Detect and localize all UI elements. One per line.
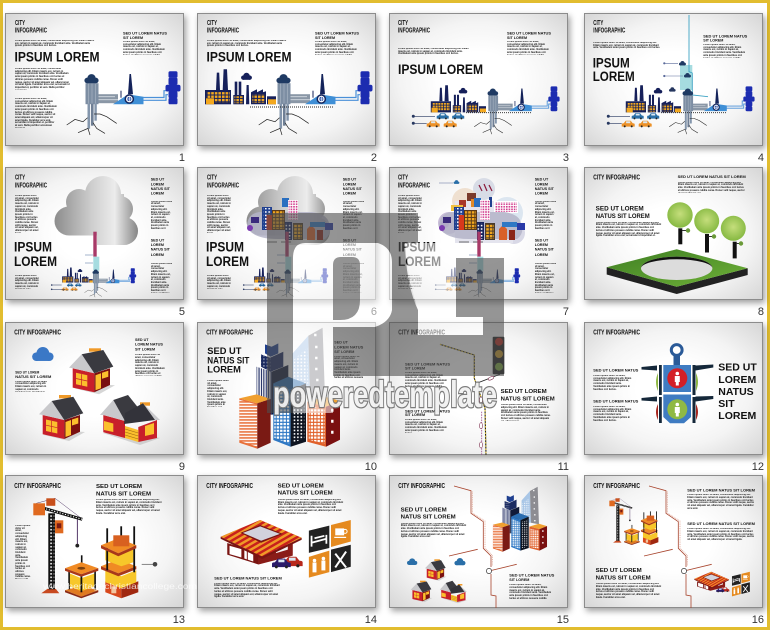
side heading one: SED UT (151, 178, 165, 182)
top heading (278, 483, 333, 497)
traffic light (477, 337, 504, 383)
slide 10 drawing (206, 327, 364, 449)
side heading one: LOREM (151, 183, 164, 187)
houses (411, 559, 467, 603)
heading one (405, 363, 451, 371)
title (398, 172, 430, 189)
right heading: SED UT (718, 362, 757, 374)
right heading: SED UT (334, 341, 349, 345)
panel: slide 1 (5, 13, 184, 146)
right heading: LOREM NATUS (334, 345, 364, 349)
panel: slide 3 (389, 13, 568, 146)
main heading (593, 56, 635, 84)
title: CITY INFOGRAPHIC (398, 327, 445, 336)
main heading: IPSUM LOREM (14, 50, 100, 65)
water plant diagram (259, 71, 372, 135)
illustrated cloud background (438, 178, 525, 244)
side heading one: LOREM (535, 183, 548, 187)
side heading one: LOREM (343, 191, 356, 195)
right heading: SIT LOREM (509, 578, 529, 582)
side heading two: SED UT (343, 239, 357, 243)
right heading: SIT LOREM (135, 347, 155, 351)
watermark logo pt (267, 213, 504, 413)
title: INFOGRAPHIC (207, 26, 239, 35)
side heading (507, 31, 552, 40)
heading two: NATUS SIT LOREM (501, 396, 555, 402)
frame right bar (767, 0, 770, 630)
right heading (509, 574, 555, 582)
top heading: NATUS SIT LOREM (278, 491, 333, 497)
house one (69, 348, 115, 394)
title: CITY INFOGRAPHIC (593, 327, 640, 336)
slide 16 drawing (593, 481, 755, 608)
left heading: NATUS SIT LOREM (401, 515, 456, 521)
top heading: SED UT LOREM NATUS SIT LOREM (678, 175, 746, 179)
side heading (123, 31, 168, 40)
side heading two (535, 239, 555, 257)
tree one (667, 202, 693, 244)
main heading: LOREM (14, 254, 57, 269)
panel: slide 11 (389, 322, 568, 455)
side heading one: LOREM (535, 191, 548, 195)
title: CITY (398, 18, 408, 27)
ground line (250, 106, 333, 108)
page number: 1 (179, 152, 185, 164)
heading three (405, 409, 451, 417)
panel: slide 4 (584, 13, 763, 146)
title: INFOGRAPHIC (207, 180, 239, 189)
side heading: SIT LOREM (315, 36, 335, 40)
title: INFOGRAPHIC (398, 180, 430, 189)
page number: 9 (179, 460, 185, 472)
building cluster (493, 487, 547, 552)
house two (39, 395, 85, 441)
side heading (315, 31, 360, 40)
page number: 3 (563, 152, 569, 164)
factory (431, 85, 486, 112)
slide 1 drawing (14, 18, 180, 136)
clouds (407, 558, 465, 565)
panel: slide 6 (197, 167, 376, 300)
title: CITY (15, 172, 25, 181)
left heading: NATUS SIT LOREM (15, 375, 51, 379)
left heading one: SED UT LOREM NATUS (593, 368, 639, 372)
heading one: SED UT LOREM NATUS (405, 363, 451, 367)
slide 2 drawing (205, 18, 372, 136)
city buildings in cloud (439, 198, 525, 242)
title: CITY (593, 18, 603, 27)
title: CITY INFOGRAPHIC (593, 481, 640, 490)
slide 3 drawing (398, 18, 560, 134)
main heading: IPSUM LOREM (206, 50, 292, 65)
right heading: SIT LOREM (334, 350, 354, 354)
left heading: SED UT (207, 346, 242, 356)
side heading two: NATUS SIT (535, 248, 555, 252)
title (593, 18, 626, 35)
cars (427, 113, 464, 127)
houses and top details (439, 180, 518, 213)
page number: 15 (557, 614, 569, 626)
left heading (596, 206, 650, 220)
frame left bar (0, 0, 3, 630)
side heading one: SED UT (535, 178, 549, 182)
shop and service icons (221, 520, 351, 578)
side heading one: LOREM (343, 183, 356, 187)
house three (100, 395, 160, 445)
slide 14 drawing (206, 481, 351, 580)
pipeline (644, 486, 712, 608)
cable line (440, 344, 486, 455)
left heading two: SED UT LOREM NATUS (593, 400, 639, 404)
side heading one: NATUS SIT (535, 187, 555, 191)
side heading one (343, 178, 363, 195)
title: CITY INFOGRAPHIC (206, 481, 253, 490)
side heading (703, 34, 748, 43)
page number: 11 (558, 460, 569, 472)
source url watermark: www.heritagechristiancollege.com (42, 582, 197, 591)
title: CITY INFOGRAPHIC (14, 481, 61, 490)
side heading two: LOREM (343, 253, 356, 257)
right heading: LOREM NATUS (135, 343, 164, 347)
page number: 8 (758, 306, 764, 318)
heading two: SED UT LOREM (501, 389, 547, 395)
car callout lines (412, 115, 435, 125)
left heading: NATUS SIT LOREM (596, 575, 651, 581)
mini city scene (243, 232, 328, 297)
heading (96, 484, 151, 497)
title (15, 18, 47, 35)
panel: slide 12 (584, 322, 763, 455)
heading three: SED UT LOREM NATUS (405, 409, 451, 413)
main heading: IPSUM (398, 240, 436, 255)
page number: 4 (758, 152, 764, 164)
slide 11 drawing (398, 327, 555, 455)
title: CITY (207, 18, 217, 27)
side heading two (151, 239, 171, 257)
slide 13 drawing (14, 481, 158, 598)
lower heading: SED UT LOREM NATUS SIT LOREM (214, 576, 282, 580)
page number: 14 (365, 614, 377, 626)
shop and service icons (694, 572, 750, 596)
right heading (135, 338, 164, 351)
cyan tower and line (680, 15, 708, 97)
slide 7 drawing (398, 172, 555, 298)
building cluster (239, 328, 340, 449)
heading three: SIT LOREM (405, 413, 425, 417)
side heading one (535, 178, 555, 195)
title: CITY INFOGRAPHIC (593, 172, 640, 181)
ground line (661, 112, 727, 114)
factory (205, 69, 276, 104)
side heading two: LOREM (343, 243, 356, 247)
side heading: SED UT LOREM NATUS (123, 31, 168, 35)
side heading two: LOREM (535, 243, 548, 247)
title: CITY (207, 172, 217, 181)
title: CITY INFOGRAPHIC (206, 327, 253, 336)
title: CITY INFOGRAPHIC (14, 327, 61, 336)
left heading (596, 568, 651, 581)
ground line (466, 112, 532, 114)
page number: 7 (563, 306, 569, 318)
slide 15 drawing (398, 481, 555, 608)
title (398, 18, 430, 35)
main heading: IPSUM (593, 56, 630, 71)
tree two (694, 208, 719, 252)
frame top bar (0, 0, 770, 3)
slide 4 drawing (593, 15, 755, 134)
panel: slide 13 (5, 475, 184, 608)
side heading one: NATUS SIT (343, 187, 363, 191)
main heading: IPSUM LOREM (398, 62, 483, 77)
page number: 10 (365, 460, 377, 472)
left heading: SED UT LOREM (596, 206, 644, 213)
side heading one: NATUS SIT (151, 187, 171, 191)
heading one: SIT LOREM (405, 367, 425, 371)
slide 8 drawing (593, 172, 748, 294)
title: CITY (398, 172, 408, 181)
small clouds with callouts (663, 61, 691, 92)
callout dot (142, 562, 157, 567)
crane and buildings (609, 498, 658, 545)
side heading: SIT LOREM (507, 36, 527, 40)
side heading: SED UT LOREM NATUS (315, 31, 360, 35)
side heading two: NATUS SIT (343, 248, 363, 252)
crane and buildings (33, 498, 138, 598)
left heading: SED UT LOREM (401, 507, 447, 513)
panel: slide 2 (197, 13, 376, 146)
side heading one: SED UT (343, 178, 357, 182)
mini city scene (435, 232, 520, 297)
side heading two: NATUS SIT (151, 248, 171, 252)
slide 9 drawing (14, 327, 164, 445)
blue cloud (32, 347, 54, 361)
mini city scene (51, 232, 136, 297)
platform (607, 249, 748, 294)
right heading: LOREM (718, 410, 756, 422)
left heading: NATUS SIT (207, 355, 250, 365)
pipeline (449, 486, 517, 608)
left heading (207, 346, 250, 375)
main heading: LOREM (593, 69, 635, 84)
city buildings in cloud (247, 198, 333, 242)
heading: SED UT LOREM (96, 484, 142, 490)
side heading two: LOREM (535, 253, 548, 257)
right heading: NATUS (718, 386, 754, 398)
slide 5 drawing (14, 172, 171, 298)
page number: 12 (752, 460, 764, 472)
main heading (14, 240, 57, 269)
panel: slide 7 (389, 167, 568, 300)
slide 12 drawing (593, 327, 757, 424)
panel: slide 15 (389, 475, 568, 608)
page number: 5 (179, 306, 185, 318)
frame bottom bar (0, 627, 770, 630)
side heading one: LOREM (151, 191, 164, 195)
title (207, 18, 239, 35)
side heading one (151, 178, 171, 195)
title: INFOGRAPHIC (15, 180, 47, 189)
title: INFOGRAPHIC (398, 26, 430, 35)
title (15, 172, 47, 189)
side heading: SED UT LOREM NATUS (507, 31, 552, 35)
title: CITY (15, 18, 25, 27)
main heading: LOREM (398, 254, 441, 269)
heading two (501, 389, 555, 402)
page number: 2 (371, 152, 377, 164)
panel: slide 16 (584, 475, 763, 608)
page number: 16 (752, 614, 764, 626)
side heading two: SED UT (535, 239, 549, 243)
side heading: SED UT LOREM NATUS (703, 34, 748, 38)
panel: slide 5 (5, 167, 184, 300)
car callout lines (607, 115, 630, 125)
water plant diagram (474, 86, 560, 134)
page number: 13 (173, 614, 185, 626)
water plant diagram (669, 86, 755, 134)
panel: slide 8 (584, 167, 763, 300)
side heading two: SED UT (151, 239, 165, 243)
left heading (401, 507, 456, 521)
main heading (206, 240, 249, 269)
panel: slide 9 (5, 322, 184, 455)
side heading: SIT LOREM (703, 39, 723, 43)
right heading: LOREM (718, 374, 756, 386)
right heading: SED UT LOREM NATUS (509, 574, 555, 578)
main heading: IPSUM (14, 240, 52, 255)
gray cloud (246, 176, 330, 245)
main heading: IPSUM (206, 240, 244, 255)
side heading two: LOREM (151, 253, 164, 257)
left heading: SED UT LOREM (596, 568, 642, 574)
right heading: SIT (718, 398, 735, 410)
panel: slide 14 (197, 475, 376, 608)
heading one: SED UT LOREM NATUS SIT LOREM (687, 489, 755, 493)
watermark counters (293, 243, 483, 413)
pedestrian traffic signal (642, 345, 713, 423)
right heading: SED UT (135, 338, 149, 342)
watermark wordmark: poweredtemplate (273, 374, 497, 415)
left heading (15, 370, 51, 379)
main heading: LOREM (206, 254, 249, 269)
right heading (718, 362, 757, 422)
side heading: SIT LOREM (123, 36, 143, 40)
left heading: LOREM (207, 365, 241, 375)
left heading: NATUS SIT LOREM (596, 213, 650, 220)
heading two: SED UT LOREM NATUS SIT LOREM (687, 522, 755, 526)
left heading: SED UT LOREM (15, 370, 39, 374)
page number: 6 (371, 306, 377, 318)
side heading two (343, 239, 363, 257)
tree three (721, 216, 746, 258)
panel: slide 10 (197, 322, 376, 455)
slide 6 drawing (206, 172, 363, 298)
water plant diagram (67, 71, 180, 135)
title: INFOGRAPHIC (15, 26, 47, 35)
cars (622, 113, 659, 127)
heading: NATUS SIT LOREM (96, 491, 151, 497)
factory (626, 85, 681, 112)
cable links (480, 376, 494, 448)
gray cloud (54, 176, 138, 245)
side heading two: LOREM (151, 243, 164, 247)
right heading (334, 341, 364, 354)
title: CITY INFOGRAPHIC (398, 481, 445, 490)
title: INFOGRAPHIC (593, 26, 626, 35)
top heading: SED UT LOREM (278, 483, 324, 489)
main heading (398, 240, 441, 269)
title (207, 172, 239, 189)
